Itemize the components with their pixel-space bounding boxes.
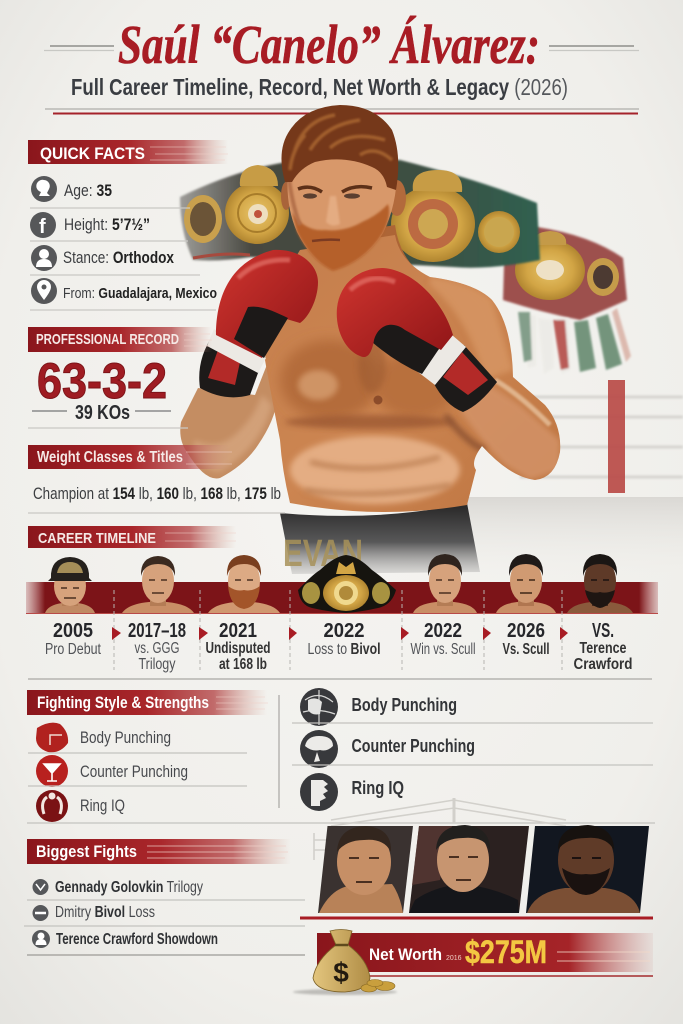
trunks: EVAN (283, 533, 363, 575)
timeline band (26, 582, 658, 613)
milestone: 2017-18 (128, 620, 186, 673)
eyes and brows (298, 187, 372, 192)
milestone: 2021 (206, 620, 270, 673)
fact: height (30, 212, 150, 238)
beard (292, 204, 389, 271)
ring illustration (314, 798, 566, 860)
fact: height: f (39, 216, 46, 238)
strength: body punching: Body Punching (352, 695, 457, 715)
strength: body punching: Body Punching (80, 729, 171, 747)
fact: from (31, 278, 217, 304)
milestone: 2005: 2005 (53, 620, 93, 642)
icon: money bag: $ (333, 957, 349, 988)
head (281, 105, 406, 271)
icon: money bag (293, 930, 397, 995)
heading: fighting style: Fighting Style & Strengths (37, 694, 209, 712)
portrait: 2022 win (413, 554, 477, 613)
boxer (180, 105, 560, 575)
milestone: 2017-18: 2017–18 (128, 620, 186, 642)
portrait: 2021 (208, 555, 280, 613)
torso and near arm (265, 235, 560, 512)
panel: fighting style and strengths (27, 690, 655, 823)
far forearm (180, 362, 277, 478)
fight: Crawford: Terence Crawford Showdown (56, 931, 218, 948)
fact: height: Height: 5’7½” (64, 216, 150, 234)
milestones text (45, 620, 632, 673)
belt: main front (180, 160, 540, 268)
fight: Bivol: Dmitry Bivol Loss (55, 904, 155, 921)
heading: career timeline: CAREER TIMELINE (38, 530, 156, 547)
strength: ring IQ: Ring IQ (352, 778, 404, 798)
heading: biggest fights (27, 839, 292, 867)
panel: career timeline (26, 526, 658, 679)
panel: weight classes and titles (28, 445, 285, 513)
subtitle: Full Career Timeline, Record, Net Worth & Legacy (2026) (71, 74, 568, 100)
photo: Golovkin (318, 826, 413, 913)
milestone: 2021: at 168 lb (219, 656, 267, 673)
heading: weight classes (28, 445, 232, 472)
photo: Bivol (409, 825, 529, 913)
strength: body punching (300, 688, 457, 726)
panel: net worth (293, 930, 653, 995)
left glove (199, 250, 318, 397)
milestone: 2021: Undisputed (206, 640, 270, 657)
icon: championship belt (298, 555, 396, 613)
strength: counter punching: Counter Punching (352, 736, 475, 756)
strength: counter punching (36, 755, 188, 787)
strength: ring IQ (36, 790, 125, 822)
net worth label: Net Worth (369, 946, 442, 964)
milestone: versus Crawford: VS. (592, 620, 614, 642)
right glove (337, 268, 497, 412)
panel: quick facts (28, 140, 232, 310)
heading: professional record: PROFESSIONAL RECORD (36, 331, 179, 348)
heading: weight classes: Weight Classes & Titles (37, 449, 183, 466)
milestone: versus Crawford: Crawford (574, 656, 632, 673)
strength: body punching (36, 723, 171, 752)
panel: strengths right column (292, 688, 653, 811)
heading: biggest fights: Biggest Fights (36, 843, 137, 861)
fight: Golovkin: Gennady Golovkin Trilogy (55, 879, 203, 896)
milestone: 2017-18: vs. GGG (134, 640, 180, 657)
milestone: versus Crawford: Terence (580, 640, 627, 657)
strength: counter punching (300, 730, 475, 768)
milestone: 2026 (502, 620, 550, 658)
fact: stance (31, 245, 175, 271)
record number: 63-3-2 (37, 353, 167, 409)
heading: quick facts: QUICK FACTS (40, 144, 145, 163)
knockouts: 39 KOs (75, 402, 130, 424)
heading: career timeline (28, 526, 240, 552)
milestone: 2026: 2026 (507, 620, 545, 642)
heading: professional record (28, 327, 212, 355)
background ring (440, 380, 683, 577)
portrait: 2005 (45, 557, 95, 613)
portrait: 2026 (496, 554, 556, 613)
knockouts (32, 402, 171, 424)
title: Saúl “Canelo” Álvarez: (118, 14, 540, 75)
heading: fighting style (27, 690, 268, 718)
net worth value: $275M (465, 934, 547, 970)
panel: professional record (28, 327, 212, 428)
milestone: 2017-18: Trilogy (138, 656, 176, 673)
belt: rear right (503, 227, 631, 374)
trunks (280, 503, 480, 575)
milestone: 2022 loss (308, 620, 380, 658)
portrait: Crawford (567, 554, 633, 613)
fact: stance: Stance: Orthodox (63, 249, 175, 267)
fight: Crawford (32, 930, 218, 948)
championship belts (180, 160, 631, 374)
milestone: 2005 (45, 620, 102, 658)
panel: biggest fights (24, 839, 305, 955)
strength: ring IQ: Ring IQ (80, 797, 125, 815)
arrows (112, 627, 568, 640)
neck (305, 225, 430, 300)
photo: Crawford (526, 825, 649, 913)
milestone: versus Crawford (574, 620, 632, 673)
strength: counter punching: Counter Punching (80, 763, 188, 781)
milestone: 2022 win: Win vs. Scull (410, 641, 476, 658)
milestone: 2022 loss: 2022 (324, 620, 364, 642)
fact: from: From: Guadalajara, Mexico (63, 285, 217, 302)
hair (281, 105, 398, 190)
milestone: 2026: Vs. Scull (502, 641, 550, 658)
panel: net worth: 2016 (446, 955, 462, 962)
milestone: 2022 win: 2022 (424, 620, 462, 642)
fact: age (31, 176, 112, 202)
milestone: 2022 win (410, 620, 476, 658)
muscle shading (280, 277, 560, 510)
portrait: 2017-18 (122, 556, 194, 613)
milestone: 2005: Pro Debut (45, 641, 102, 658)
fact: age: Age: 35 (64, 182, 112, 200)
milestone: 2021: 2021 (219, 620, 257, 642)
strength: ring IQ (300, 773, 404, 811)
milestone: 2022 loss: Loss to Bivol (308, 641, 380, 658)
weight classes text: Champion at 154 lb, 160 lb, 168 lb, 175 lb (33, 485, 281, 503)
heading: quick facts (28, 140, 232, 168)
